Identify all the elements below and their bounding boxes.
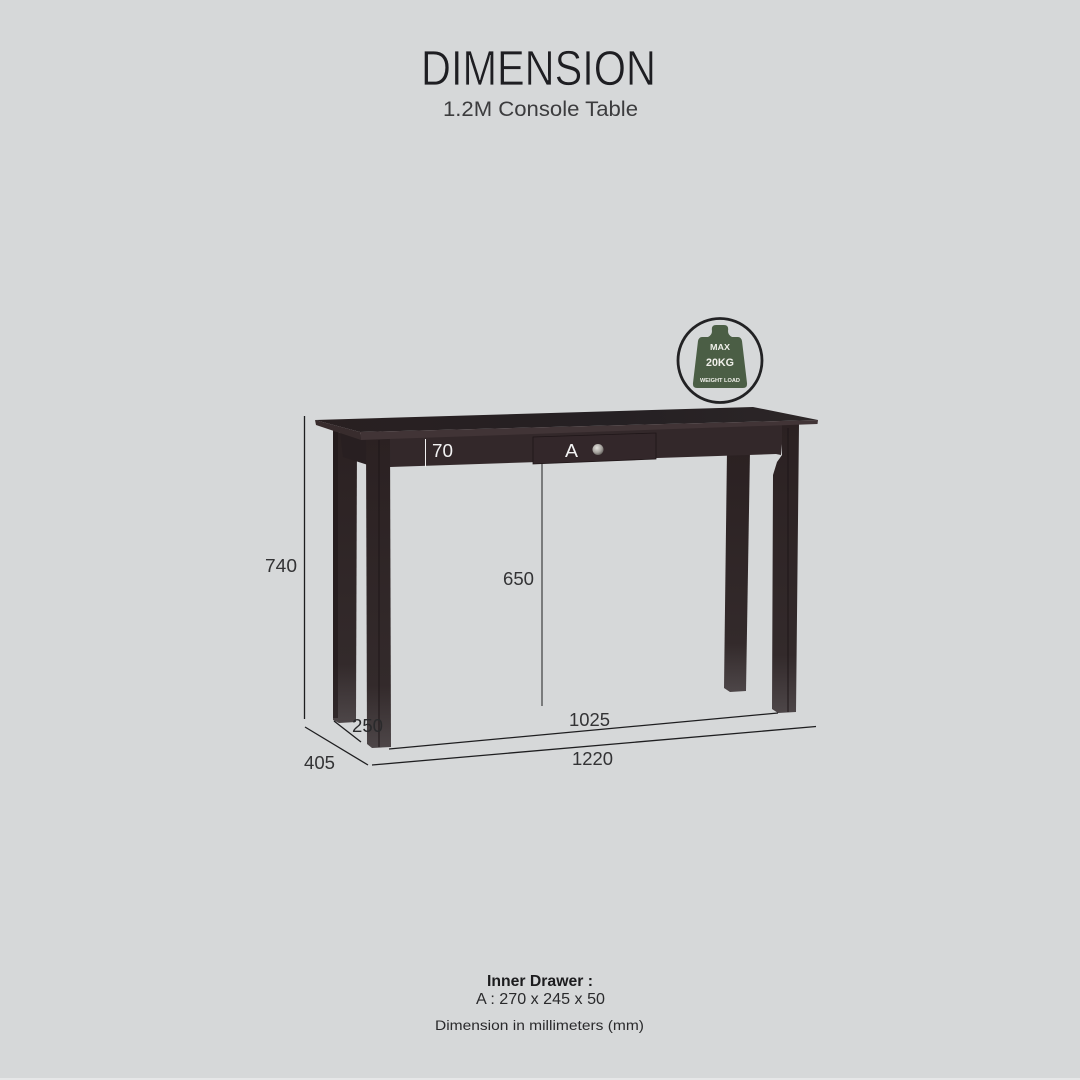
unit note: Dimension in millimeters (mm) — [435, 1018, 644, 1033]
icon: max weight load badge: 20KG — [706, 357, 734, 369]
icon: max weight load badge — [678, 318, 762, 402]
front apron — [375, 422, 784, 467]
label: 405: 405 — [304, 752, 335, 773]
label: 250: 250 — [352, 715, 383, 736]
icon: max weight load badge: WEIGHT LOAD — [700, 378, 740, 384]
right front leg — [772, 424, 799, 713]
back left leg — [333, 430, 357, 723]
label: drawer A: A — [565, 440, 579, 461]
dimension line: 740 height — [304, 416, 306, 719]
label: 70: 70 — [432, 440, 453, 461]
side apron — [340, 430, 368, 465]
subtitle: 1.2M Console Table — [443, 98, 638, 121]
dimension line: 70 apron height — [424, 439, 426, 467]
label: 1220: 1220 — [572, 748, 613, 769]
label: 740: 740 — [265, 555, 297, 576]
table top surface — [315, 407, 818, 432]
dimension line: 1220 width — [372, 726, 816, 765]
dimension line: 250 inner depth — [334, 721, 361, 742]
back right leg — [724, 450, 750, 692]
drawer — [533, 433, 656, 464]
inner drawer dimensions: A : 270 x 245 x 50 — [476, 991, 605, 1008]
title: DIMENSION — [421, 42, 656, 96]
drawer knob — [592, 444, 604, 455]
console table — [315, 407, 818, 748]
label: 1025: 1025 — [569, 709, 610, 730]
dimension line: 650 clearance — [541, 464, 543, 706]
left front leg — [366, 436, 391, 748]
dimension line: 1025 inner width — [389, 713, 778, 749]
icon: max weight load badge: MAX — [710, 343, 731, 352]
label: 650: 650 — [503, 568, 534, 589]
table top front edge — [360, 420, 818, 440]
inner drawer heading: Inner Drawer : — [487, 973, 593, 990]
dimension line: 405 depth — [305, 727, 368, 765]
